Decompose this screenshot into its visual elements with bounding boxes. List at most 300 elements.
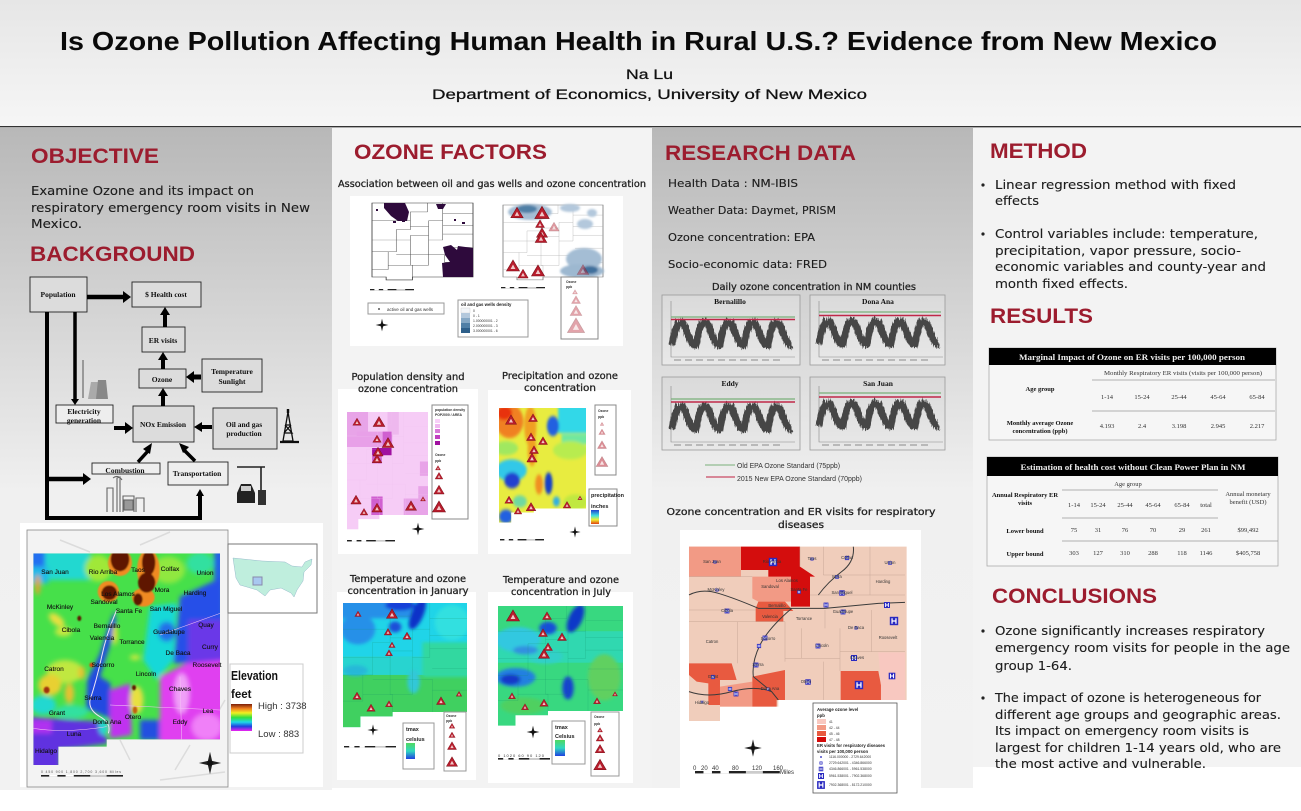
table: health cost estimate: 310	[1120, 550, 1130, 557]
county labels: Bernalillo	[768, 603, 786, 608]
table: health cost estimate: 29	[1179, 527, 1185, 534]
box: population	[30, 277, 87, 312]
county labels: San Juan	[41, 569, 69, 576]
table: marginal impact: 3.198	[1172, 423, 1186, 430]
legend: well density: 2.000000001 - 3	[473, 324, 498, 328]
panel: method results conclusions column	[973, 128, 1301, 771]
legend: tmax	[552, 721, 585, 764]
chart: Bernalillo	[662, 295, 800, 365]
legend: elevation: High : 3738	[258, 701, 307, 712]
heading: objective: OBJECTIVE	[31, 145, 159, 168]
county labels: Sandoval	[90, 599, 118, 606]
box: NOx emission: NOx Emission	[140, 420, 187, 429]
box: transportation: Transportation	[173, 469, 222, 478]
box: temperature and sunlight: Sunlight	[218, 377, 246, 386]
county labels: Roosevelt	[879, 635, 898, 640]
legend: Ozone	[435, 453, 445, 457]
table: health cost estimate: 76	[1122, 527, 1129, 534]
arrows	[47, 291, 212, 518]
compass	[744, 739, 762, 757]
county labels: Santa Fe	[790, 587, 808, 592]
county labels: San Miguel	[150, 606, 183, 613]
scale bar: Miles	[780, 770, 794, 776]
county labels: Catron	[44, 666, 64, 673]
box: temperature and sunlight	[202, 359, 262, 392]
method bullets: Linear regression method with fixed	[995, 177, 1236, 192]
method bullets	[981, 177, 1266, 291]
table: health cost estimate: 75	[1071, 527, 1077, 534]
box: health cost: $ Health cost	[145, 290, 187, 299]
icon: factory	[107, 476, 144, 512]
table: health cost estimate: $405,758	[1236, 550, 1260, 557]
chart legend: Old EPA Ozone Standard (75ppb)	[737, 463, 840, 470]
chart: Dona Ana: Dona Ana	[862, 297, 894, 306]
objective text: respiratory emergency room visits in New	[31, 200, 310, 215]
county labels: Valencia	[90, 635, 115, 642]
ozone markers	[353, 609, 462, 711]
title: Is Ozone Pollution Affecting Human Health in Rural U.S.? Evidence from New Mexico	[60, 26, 1217, 56]
table: health cost estimate: Estimation of health cost without Clean Power Plan in NM	[1020, 463, 1246, 472]
county labels: Luna	[67, 731, 82, 738]
heading: results: RESULTS	[990, 305, 1093, 328]
subtitle: January: concentration in January	[348, 586, 469, 597]
panel: elevation map	[20, 523, 323, 787]
legend: tmax: Celsius	[555, 734, 575, 740]
county labels: Chaves	[169, 686, 192, 693]
legend: tmax	[403, 723, 434, 769]
subtitle: wells: Association between oil and gas wells and ozone concentration	[338, 179, 646, 190]
county labels: Union	[197, 570, 214, 577]
legend: elevation: Elevation	[231, 668, 278, 683]
legend: ppb	[435, 459, 441, 463]
box: oil and gas production: Oil and gas	[226, 420, 262, 429]
box: temperature and sunlight: Temperature	[211, 367, 253, 376]
scale bar	[500, 539, 544, 540]
legend: tmax: celsius	[406, 737, 425, 743]
county labels: Socorro	[92, 662, 115, 669]
table: health cost estimate: 65-84	[1174, 502, 1190, 509]
legend: ozone ppb: ppb	[566, 285, 572, 289]
icon: power plant	[82, 360, 108, 399]
method bullets: precipitation, vapor pressure, socio-	[995, 243, 1241, 258]
county labels: Cibola	[721, 608, 734, 613]
county labels: Socorro	[761, 636, 776, 641]
conclusions bullets: largest for children 1-14 years old, who are	[995, 740, 1281, 755]
chart: Bernalillo: Bernalillo	[714, 297, 746, 306]
compass	[527, 726, 539, 738]
legend: well density: 0 - 1	[473, 314, 480, 318]
box: electricity generation	[56, 405, 113, 425]
county labels: De Baca	[848, 625, 865, 630]
compass	[376, 319, 388, 331]
ozone markers	[505, 414, 582, 514]
scale bar: 0	[693, 766, 697, 772]
table: health cost estimate: 70	[1150, 527, 1156, 534]
table: health cost estimate: Age group	[1114, 481, 1142, 488]
scale bar: 0 450 900 1,800 2,700 3,600 Miles	[41, 770, 121, 774]
box: oil and gas production	[213, 408, 277, 449]
chart: Eddy	[662, 377, 800, 450]
legend: ozone: Ozone	[446, 714, 456, 718]
legend: well density: 1.000000001 - 2	[473, 319, 498, 323]
legend	[432, 405, 468, 519]
county labels: McKinley	[47, 604, 74, 611]
legend: tmax: tmax	[555, 725, 569, 731]
figure: precipitation map	[488, 390, 631, 554]
table: health cost estimate: Lower bound	[1006, 528, 1044, 535]
scale bar	[498, 753, 550, 760]
objective text	[31, 183, 310, 231]
county labels: Quay	[198, 622, 215, 629]
county labels: Roosevelt	[193, 662, 222, 669]
legend: ozone level and ER visits: ppb	[817, 713, 825, 718]
legend: POP2000 / AREA	[435, 413, 463, 417]
table: health cost estimate: total	[1200, 502, 1212, 509]
subtitle: July	[502, 575, 619, 598]
legend: ozone: Ozone	[594, 715, 604, 719]
legend: ozone level and ER visits: 47 - 48	[829, 738, 840, 742]
flow diagram: ozone causes and health cost	[30, 277, 299, 518]
legend: precipitation: inches	[591, 504, 608, 510]
table: marginal impact: 2.945	[1211, 423, 1225, 430]
map title	[666, 507, 936, 531]
scale bar	[347, 540, 395, 541]
county labels: Lincoln	[815, 643, 829, 648]
header band	[0, 0, 1301, 127]
map: active wells	[372, 203, 473, 280]
table: health cost estimate: visits	[1018, 500, 1033, 507]
county labels: De Baca	[166, 650, 191, 657]
county labels: Torrance	[796, 616, 813, 621]
table: health cost estimate: 261	[1201, 527, 1211, 534]
county labels: Dona Ana	[93, 719, 122, 726]
scale bars	[370, 287, 545, 290]
legend: ozone level and ER visits: Average ozone level	[817, 707, 858, 712]
county labels: San Miguel	[832, 590, 853, 595]
legend: well density	[458, 300, 528, 337]
county labels: Lincoln	[136, 671, 157, 678]
icon: car at fuel pump	[237, 467, 266, 505]
heading: ozone factors: OZONE FACTORS	[354, 141, 547, 164]
county labels: Rio Arriba	[89, 569, 118, 576]
table: health cost estimate: Annual Respiratory ER	[992, 492, 1058, 499]
heading: research data: RESEARCH DATA	[665, 142, 856, 165]
figure: ozone and ER visits map	[680, 530, 921, 800]
legend: precipitation: precipitation	[591, 493, 625, 499]
legend: ozone	[595, 405, 616, 475]
county labels: Harding	[184, 590, 207, 597]
county labels: Eddy	[173, 719, 188, 726]
county labels: Lea	[203, 708, 214, 715]
data sources list: Weather Data: Daymet, PRISM	[668, 205, 836, 217]
compass	[569, 526, 581, 538]
subtitle: January	[348, 574, 469, 597]
county labels: Taos	[131, 567, 146, 574]
box: health cost	[132, 282, 201, 307]
scale bar: 20	[701, 766, 708, 772]
conclusions bullets: Its impact on emergency room visits is	[995, 723, 1249, 738]
legend: ozone level and ER visits: ER visits for respiratory diseases	[817, 743, 886, 748]
county labels: Los Alamos	[776, 578, 798, 583]
table: marginal impact: 4.193	[1100, 423, 1114, 430]
county labels: Sierra	[84, 695, 102, 702]
legend: well density: 3.000000001 - 6	[473, 329, 498, 333]
table: health cost estimate: 127	[1093, 550, 1104, 557]
legend: population density	[435, 408, 465, 412]
subtitle: precipitation: Precipitation and ozone	[502, 371, 618, 382]
table: marginal impact: 2.217	[1250, 423, 1265, 430]
ozone markers	[506, 610, 618, 710]
scale bar: 120	[752, 766, 763, 772]
conclusions bullets: Ozone significantly increases respiratory	[995, 623, 1266, 638]
table: health cost estimate: 288	[1148, 550, 1158, 557]
county labels: Otero	[801, 679, 812, 684]
subtitle: population, second line: ozone concentration	[358, 384, 458, 395]
table: health cost estimate: Upper bound	[1007, 551, 1044, 558]
legend: ozone level and ER visits: 41	[829, 720, 833, 724]
county labels: Union	[885, 560, 896, 565]
county labels: Colfax	[841, 555, 854, 560]
subtitle: population: Population density and	[352, 372, 464, 383]
chart legend: 2015 New EPA Ozone Standard (70ppb)	[737, 476, 862, 483]
legend: ozone ppb	[561, 277, 598, 339]
legend: ozone level and ER visits: 7902.368001 - 8172.210000	[829, 783, 872, 787]
table: health cost estimate: 303	[1069, 550, 1079, 557]
legend: well density: 0	[473, 309, 475, 313]
raster	[499, 408, 586, 523]
map frame with terrain	[27, 530, 228, 787]
table: health cost estimate: benefit (USD)	[1229, 499, 1267, 506]
county labels: Rio Arriba	[763, 559, 782, 564]
compass	[199, 752, 221, 774]
table: health cost estimate: 1146	[1200, 550, 1213, 557]
legend: ozone ppb: Ozone	[566, 280, 576, 284]
county labels: Chaves	[850, 655, 864, 660]
county labels: Los Alamos	[101, 591, 136, 598]
county labels: McKinley	[708, 587, 725, 592]
table: marginal impact: 2.4	[1138, 423, 1147, 430]
table: marginal impact: Monthly Respiratory ER visits (visits per 100,000 person)	[1104, 370, 1262, 377]
legend: active wells	[368, 303, 444, 314]
subtitle: July: concentration in July	[511, 587, 611, 598]
county labels	[35, 566, 222, 755]
legend: tmax: tmax	[406, 727, 420, 733]
scale bar: 40	[712, 766, 719, 772]
legend: ozone level and ER visits: 2729.642001 - 4346.866000	[829, 761, 872, 765]
table: health cost estimate: 118	[1177, 550, 1187, 557]
table: health cost estimate: Annual monetary	[1225, 491, 1271, 498]
panel: ozone factors column	[332, 128, 652, 788]
conclusions bullets: the most active and vulnerable.	[995, 756, 1206, 771]
scale bar	[693, 766, 794, 776]
table: marginal impact: 15-24	[1134, 394, 1150, 401]
objective text: Examine Ozone and its impact on	[31, 183, 254, 198]
box: NOx emission	[133, 406, 194, 442]
data sources list	[668, 178, 836, 271]
data sources list: Ozone concentration: EPA	[668, 232, 816, 244]
conclusions bullets	[981, 623, 1290, 771]
conclusions bullets: group 1-64.	[995, 658, 1072, 673]
county labels: Hidalgo	[695, 700, 710, 705]
scale bar	[41, 770, 123, 777]
box: combustion: Combustion	[105, 466, 145, 475]
subtitle: January: Temperature and ozone	[349, 574, 466, 585]
scale bar: 0 1020 60 90 120	[498, 753, 545, 758]
scale bar: 80	[732, 766, 739, 772]
county labels: Valencia	[762, 614, 779, 619]
legend: ozone level and ER visits: 42 - 44	[829, 726, 840, 730]
heading: method: METHOD	[990, 140, 1087, 163]
heading: background: BACKGROUND	[30, 243, 195, 266]
conclusions bullets: different age groups and geographic areas.	[995, 707, 1281, 722]
table: marginal impact: 45-64	[1210, 394, 1226, 401]
county labels: Mora	[832, 574, 842, 579]
objective text: Mexico.	[31, 216, 82, 231]
legend: ozone level and ER visits: 4346.866001 - 5961.538000	[829, 767, 872, 771]
county labels: Sierra	[752, 662, 764, 667]
legend: ozone: Ozone	[598, 409, 608, 413]
chart: Dona Ana	[810, 295, 945, 365]
box: transportation	[168, 462, 228, 485]
table: marginal impact: 65-84	[1249, 394, 1265, 401]
box: electricity generation: generation	[67, 416, 102, 425]
icon: oil derrick	[280, 409, 299, 442]
subtitle: precipitation, second line: concentration	[524, 383, 596, 394]
compass	[367, 724, 379, 736]
county labels: Harding	[876, 579, 891, 584]
county labels: Hidalgo	[35, 748, 57, 755]
table: marginal impact: Marginal Impact of Ozone on ER visits per 100,000 person	[1019, 353, 1246, 362]
method bullets: economic variables and county-year and	[995, 259, 1266, 274]
compass	[412, 523, 424, 535]
author: Na Lu	[626, 67, 673, 82]
legend: precipitation	[589, 489, 625, 526]
ER visit markers	[701, 556, 898, 703]
legend: elevation: Low : 883	[258, 729, 299, 740]
legend: ozone level and ER visits: 5961.538001 - 7902.368000	[829, 774, 872, 778]
chart: San Juan	[810, 377, 945, 450]
legend: active wells: active oil and gas wells	[387, 307, 434, 312]
legend: ozone	[591, 712, 619, 776]
raster	[343, 603, 467, 728]
table: marginal impact: Monthly average Ozone	[1007, 420, 1073, 427]
choropleth	[346, 411, 429, 533]
county labels: Grant	[708, 674, 719, 679]
county labels: Cibola	[62, 627, 81, 634]
raster	[496, 603, 624, 729]
legend: ozone level and ER visits: visits per 100,000 person	[817, 749, 868, 754]
box: oil and gas production: production	[226, 429, 262, 438]
table: marginal impact: Age group	[1026, 386, 1055, 393]
figure: population density map	[338, 389, 478, 554]
table: marginal impact: concentration (ppb)	[1012, 428, 1068, 435]
scale bar: 160	[773, 766, 784, 772]
subtitle: July: Temperature and ozone	[502, 575, 619, 586]
table: health cost estimate: 45-64	[1145, 502, 1161, 509]
table: health cost estimate: 31	[1095, 527, 1101, 534]
scale bar	[344, 746, 396, 747]
box: ozone	[139, 369, 186, 388]
table: marginal impact: 1-14	[1101, 394, 1114, 401]
conclusions bullets: The impact of ozone is heterogeneous for	[994, 690, 1262, 705]
box: ER visits: ER visits	[149, 336, 177, 345]
chart: San Juan: San Juan	[863, 379, 894, 388]
county labels: Dona Ana	[761, 686, 780, 691]
county labels: Guadalupe	[153, 629, 185, 636]
county labels: Colfax	[161, 566, 180, 573]
table: health cost estimate: 25-44	[1117, 502, 1133, 509]
table: health cost estimate: $99,492	[1237, 527, 1259, 534]
figure: January temperature map	[337, 592, 476, 780]
figure: July temperature map	[488, 592, 633, 783]
county labels: San Juan	[703, 559, 722, 564]
panel: objective and background column	[0, 128, 332, 790]
map: well density and ozone	[503, 204, 604, 280]
legend: elevation: feet	[231, 689, 252, 701]
heading: conclusions: CONCLUSIONS	[992, 585, 1157, 608]
chart title: daily ozone: Daily ozone concentration in NM counties	[712, 282, 916, 293]
method bullets: Control variables include: temperature,	[995, 226, 1258, 241]
affiliation: Department of Economics, University of New Mexico	[432, 87, 867, 102]
legend: well density: oil and gas wells density	[461, 302, 512, 307]
legend: ozone level and ER visits	[813, 703, 897, 793]
box: ER visits	[142, 327, 185, 352]
chart legend	[705, 463, 862, 483]
map title: Ozone concentration and ER visits for respiratory	[666, 507, 936, 518]
county labels: Taos	[808, 556, 816, 561]
ozone markers	[351, 417, 426, 515]
method bullets: month fixed effects.	[995, 276, 1128, 291]
chart: Eddy: Eddy	[721, 379, 739, 388]
legend: ozone	[444, 712, 466, 771]
panel: research data column	[652, 128, 973, 800]
table: health cost estimate: 15-24	[1090, 502, 1106, 509]
county labels: Mora	[155, 587, 170, 594]
county choropleth	[689, 547, 907, 721]
legend: ozone: ppb	[598, 415, 604, 419]
box: combustion	[92, 463, 160, 475]
data sources list: Socio-economic data: FRED	[668, 259, 827, 271]
county labels: Curry	[202, 644, 219, 651]
conclusions bullets: emergency room visits for people in the age	[995, 640, 1290, 655]
county labels: Bernalillo	[94, 623, 121, 630]
county labels: Grant	[49, 710, 65, 717]
county labels: Santa Fe	[116, 608, 143, 615]
legend: ozone: ppb	[594, 722, 600, 726]
table: marginal impact	[989, 348, 1276, 440]
legend: ozone: ppb	[446, 719, 452, 723]
data sources list: Health Data : NM-IBIS	[668, 178, 798, 190]
table: health cost estimate	[987, 457, 1278, 566]
table: health cost estimate: 1-14	[1068, 502, 1081, 509]
county labels: Guadalupe	[833, 609, 854, 614]
map title: diseases	[778, 520, 824, 531]
box: electricity generation: Electricity	[67, 407, 101, 416]
county labels: Otero	[125, 714, 142, 721]
county labels: Catron	[706, 639, 719, 644]
county labels: Torrance	[119, 639, 145, 646]
method bullets: effects	[995, 193, 1039, 208]
box: population: Population	[40, 290, 76, 299]
elevation raster	[33, 553, 220, 765]
county labels: Sandoval	[761, 584, 779, 589]
legend: ozone level and ER visits: 1116.000000 - 2729.642000	[829, 755, 871, 759]
figure: oil and gas wells maps	[350, 196, 623, 346]
legend: elevation	[230, 664, 307, 753]
inset: USA locator	[228, 544, 317, 613]
box: ozone: Ozone	[152, 375, 173, 384]
table: marginal impact: 25-44	[1171, 394, 1187, 401]
